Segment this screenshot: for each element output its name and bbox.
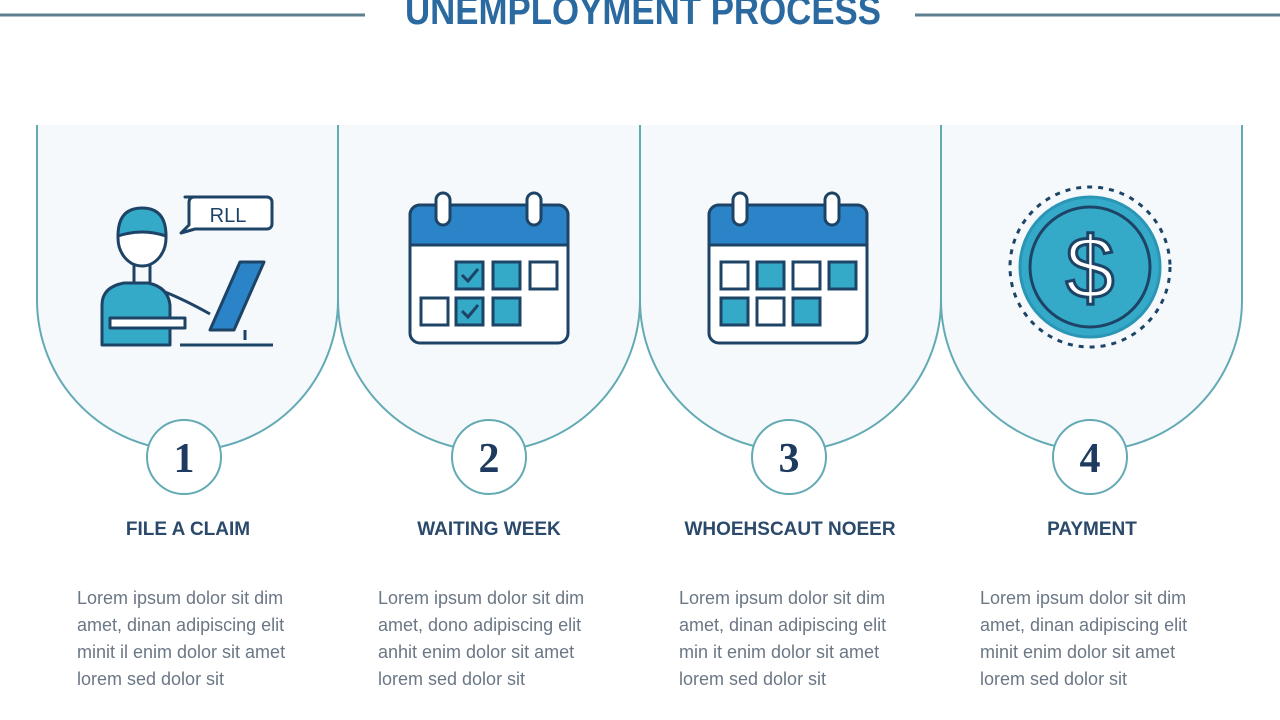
panel: step 1 (37, 125, 338, 689)
text block 4: minit enim dolor sit amet (980, 642, 1175, 662)
number circle 2: 2 (478, 436, 500, 482)
icon: dollar coin (1010, 187, 1170, 347)
text block 1 (77, 588, 285, 689)
number circle 3 (752, 420, 826, 494)
icon: person at laptop: RLL (210, 205, 246, 227)
icon: calendar 2 (709, 193, 867, 343)
icon: dollar coin: $ (1066, 218, 1114, 317)
text block 4: Lorem ipsum dolor sit dim (980, 588, 1186, 608)
panel: step 4 (941, 125, 1242, 689)
text block 3: Lorem ipsum dolor sit dim (679, 588, 885, 608)
number circle 4: 4 (1080, 436, 1100, 482)
heading 1: FILE A CLAIM (126, 519, 250, 540)
heading 4: PAYMENT (1047, 519, 1137, 540)
panel: step 3 (640, 125, 941, 689)
text block 3: lorem sed dolor sit (679, 669, 826, 689)
heading 2: WAITING WEEK (417, 519, 561, 540)
text block 2: Lorem ipsum dolor sit dim (378, 588, 584, 608)
text block 1: minit il enim dolor sit amet (77, 642, 285, 662)
text block 3: min it enim dolor sit amet (679, 642, 879, 662)
number circle 2 (452, 420, 526, 494)
number circle 3: 3 (778, 436, 800, 482)
text block 3: amet, dinan adipiscing elit (679, 615, 886, 635)
heading 3: WHOEHSCAUT NOEER (684, 519, 896, 540)
text block 2: amet, dono adipiscing elit (378, 615, 581, 635)
text block 2: lorem sed dolor sit (378, 669, 525, 689)
text block 4 (980, 588, 1187, 689)
icon: person at laptop (102, 197, 273, 345)
text block 1: lorem sed dolor sit (77, 669, 224, 689)
text block 3 (679, 588, 886, 689)
text block 2 (378, 588, 584, 689)
number circle 1: 1 (174, 436, 194, 482)
text block 4: amet, dinan adipiscing elit (980, 615, 1187, 635)
number circle 1 (147, 420, 221, 494)
panel: step 2 (338, 125, 640, 689)
text block 1: amet, dinan adipiscing elit (77, 615, 284, 635)
text block 2: anhit enim dolor sit amet (378, 642, 574, 662)
text block 1: Lorem ipsum dolor sit dim (77, 588, 283, 608)
number circle 4 (1053, 420, 1127, 494)
icon: calendar (410, 193, 568, 343)
text block 4: lorem sed dolor sit (980, 669, 1127, 689)
